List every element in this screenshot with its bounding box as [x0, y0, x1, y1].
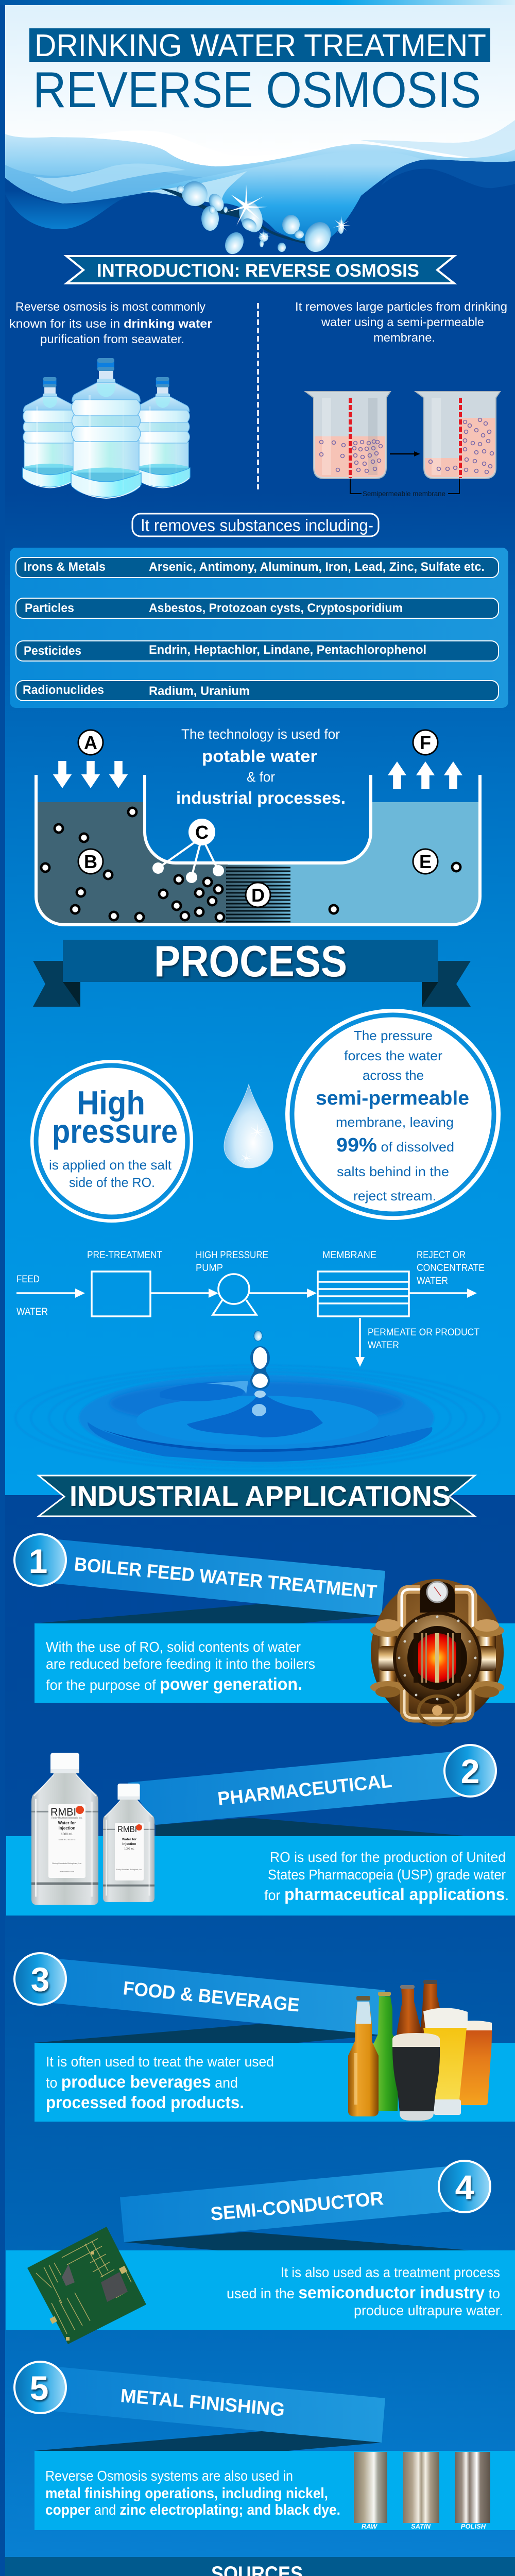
body text: RO is used for the production of United [270, 1849, 506, 1865]
heading: PHARMACEUTICAL [217, 1770, 393, 1809]
callout: high pressure: is applied on the salt [49, 1157, 172, 1173]
row: particles: Particles [25, 601, 74, 615]
text: intro left [9, 300, 212, 346]
icon: water cooler bottles [23, 358, 190, 498]
photo: water for injection bottles [31, 1753, 154, 1905]
body text: used in the semiconductor industry to [227, 2283, 500, 2302]
heading ribbon: introduction: INTRODUCTION: REVERSE OSMOSIS [97, 261, 419, 281]
callout: semi-permeable: The pressure [354, 1028, 433, 1043]
heading ribbon: process: PROCESS [154, 937, 347, 986]
icon: steampunk boiler [370, 1579, 504, 1725]
text: technology use: industrial processes. [176, 788, 346, 807]
panel: application 4 semiconductor [6, 2161, 515, 2344]
callout: high pressure: High [77, 1084, 145, 1122]
photo: satin metal [403, 2452, 439, 2530]
panel: application 2 pharmaceutical [6, 1745, 515, 1916]
label large bottle: Water for [58, 1821, 76, 1825]
row: particles [16, 598, 499, 618]
number badge 1: 1 [29, 1542, 47, 1580]
panel: application 1 boiler feed water [14, 1534, 515, 1725]
label A [78, 730, 103, 755]
number badge 2 [444, 1745, 496, 1797]
label large bottle: Rocky Mountain Biologicals, Inc. [52, 1862, 82, 1865]
number badge 3 [14, 1953, 66, 2005]
diagram: process flow: FEED [16, 1274, 40, 1285]
illustration: water splash ripple [15, 1331, 500, 1470]
label small bottle: Water for [122, 1838, 137, 1841]
number badge 3: 3 [31, 1960, 49, 1998]
callout: semi-permeable: forces the water [344, 1048, 442, 1063]
text: intro right: water using a semi-permeable [321, 315, 484, 329]
diagram: process flow: PERMEATE OR PRODUCT [368, 1327, 479, 1338]
body text: produce ultrapure water. [354, 2302, 503, 2318]
callout: semi-permeable: across the [363, 1067, 424, 1083]
number badge 1 [14, 1534, 66, 1586]
heading: BOILER FEED WATER TREATMENT [73, 1553, 378, 1602]
label large bottle: 1000 mL [61, 1833, 73, 1836]
label E: E [419, 851, 432, 872]
callout C [152, 819, 224, 883]
arrows: flow out [388, 761, 462, 789]
photo: polish metal [455, 2452, 490, 2530]
text: intro left: purification from seawater. [40, 332, 184, 346]
diagram: process flow: WATER [417, 1276, 448, 1286]
label small bottle: 1000 mL [124, 1848, 134, 1851]
callout: high pressure [30, 1060, 193, 1223]
body text: It is also used as a treatment process [281, 2264, 500, 2280]
body text: processed food products. [46, 2093, 244, 2112]
panel: application 3 food and beverage [14, 1953, 515, 2122]
label large bottle: Rocky Mountain Biologicals, Inc. [52, 1817, 82, 1820]
row: pesticides: Endrin, Heptachlor, Lindane, Pentachlorophenol [149, 643, 426, 657]
text: intro right [295, 300, 507, 344]
diagram: process flow: WATER [368, 1340, 399, 1351]
photo: raw metal [354, 2452, 387, 2530]
row: radionuclides: Radium, Uranium [149, 684, 250, 698]
heading ribbon: introduction [66, 256, 454, 283]
callout: semi-permeable [285, 1009, 501, 1220]
text: intro right: membrane. [373, 331, 435, 344]
label small bottle: Rocky Mountain Biologicals, Inc. [116, 1869, 142, 1871]
heading: SEMI-CONDUCTOR [210, 2188, 384, 2225]
row: irons and metals: Arsenic, Antimony, Aluminum, Iron, Lead, Zinc, Sulfate etc. [149, 560, 485, 574]
text: technology use: & for [247, 769, 275, 785]
pill heading: it removes substances: It removes substances including- [141, 516, 373, 535]
callout C: C [195, 822, 209, 843]
label D: D [251, 885, 265, 906]
text: intro left: known for its use in drinking water [9, 317, 212, 330]
icon: circuit board [27, 2227, 146, 2344]
label small bottle: Injection [123, 1842, 136, 1846]
body text [227, 2264, 503, 2318]
diagram: process flow: HIGH PRESSURE [196, 1250, 268, 1261]
body text: for pharmaceutical applications. [264, 1885, 509, 1904]
body text: It is often used to treat the water used [46, 2054, 274, 2070]
label B: B [84, 851, 97, 872]
heading: METAL FINISHING [119, 2385, 286, 2420]
row: pesticides [16, 641, 499, 661]
heading: FOOD & BEVERAGE [122, 1977, 301, 2016]
diagram: process flow: PRE-TREATMENT [87, 1250, 162, 1261]
label small bottle: RMBI [117, 1824, 137, 1834]
callout: semi-permeable: semi-permeable [316, 1088, 469, 1109]
callout: semi-permeable: membrane, leaving [336, 1114, 454, 1130]
label large bottle: www.rmbio.com [60, 1870, 75, 1873]
label large bottle: RMBI [50, 1806, 76, 1818]
panel: application 5 metal finishing [14, 2362, 515, 2530]
callout: semi-permeable: reject stream. [353, 1188, 436, 1204]
heading ribbon: process [33, 937, 471, 1007]
panel: substances table [10, 548, 508, 708]
text: technology use: The technology is used for [181, 726, 340, 742]
body text: With the use of RO, solid contents of water [46, 1639, 301, 1655]
arrows: pressure in [53, 761, 128, 788]
body text: Reverse Osmosis systems are also used in [45, 2468, 293, 2484]
text: technology use: potable water [202, 747, 317, 766]
body text: metal finishing operations, including nickel, [45, 2485, 328, 2502]
row: particles: Asbestos, Protozoan cysts, Cryptosporidium [149, 601, 403, 615]
callout: semi-permeable: salts behind in the [337, 1164, 449, 1179]
number badge 5: 5 [30, 2369, 48, 2407]
diagram: process flow [16, 1250, 485, 1367]
title: reverse osmosis: REVERSE OSMOSIS [33, 61, 481, 118]
diagram: process flow: WATER [16, 1307, 48, 1317]
diagram: reverse osmosis tank [36, 730, 480, 925]
callout: high pressure: pressure [52, 1112, 178, 1150]
number badge 2: 2 [461, 1752, 479, 1790]
callout: semi-permeable: 99% of dissolved [336, 1134, 454, 1156]
row: radionuclides [16, 681, 499, 701]
header water wave illustration [5, 120, 515, 258]
diagram: process flow: CONCENTRATE [417, 1263, 485, 1274]
icon: osmosis beakers: Semipermeable membrane [363, 489, 445, 498]
label F: F [420, 732, 431, 753]
label large bottle [48, 1804, 85, 1878]
body text [45, 2468, 340, 2518]
label small bottle [115, 1823, 144, 1880]
body text [46, 2054, 274, 2112]
label large bottle: Store at 2 to 30 °C [59, 1838, 76, 1841]
diagram: process flow: PUMP [196, 1263, 223, 1274]
label A: A [84, 732, 97, 753]
diagram: process flow: MEMBRANE [322, 1250, 376, 1261]
callout: high pressure: side of the RO. [69, 1175, 155, 1190]
icon: water drop [224, 1084, 273, 1168]
body text: are reduced before feeding it into the boilers [46, 1656, 315, 1672]
label B [78, 849, 103, 874]
icon: osmosis beakers [305, 392, 500, 498]
text: technology use [176, 726, 346, 807]
row: radionuclides: Radionuclides [23, 683, 104, 697]
divider [257, 303, 259, 489]
label E [413, 849, 438, 874]
number badge 4: 4 [455, 2168, 474, 2206]
photo: satin metal: SATIN [411, 2522, 431, 2530]
body text: for the purpose of power generation. [46, 1674, 302, 1693]
row: irons and metals: Irons & Metals [24, 560, 106, 574]
row: irons and metals [16, 557, 499, 578]
photo: raw metal: RAW [362, 2522, 378, 2530]
number badge 5 [14, 2362, 66, 2413]
title box: drinking water treatment: DRINKING WATER TREATMENT [35, 28, 486, 63]
diagram: process flow: REJECT OR [417, 1250, 466, 1261]
number badge 4 [439, 2161, 490, 2212]
body text [46, 1639, 315, 1693]
photo: polish metal: POLISH [461, 2522, 486, 2530]
photo: beverages [348, 1980, 492, 2121]
particles [40, 807, 461, 922]
body text: copper and zinc electroplating; and black dye. [45, 2502, 340, 2518]
text: intro left: Reverse osmosis is most commonly [15, 300, 206, 313]
label D [246, 883, 270, 907]
text: intro right: It removes large particles from drinking [295, 300, 507, 313]
body text [264, 1849, 509, 1904]
body text: to produce beverages and [46, 2072, 238, 2091]
row: pesticides: Pesticides [24, 644, 81, 658]
label large bottle: Injection [59, 1826, 76, 1831]
heading ribbon: industrial applications: INDUSTRIAL APPLICATIONS [70, 1480, 451, 1512]
label F [413, 730, 438, 755]
